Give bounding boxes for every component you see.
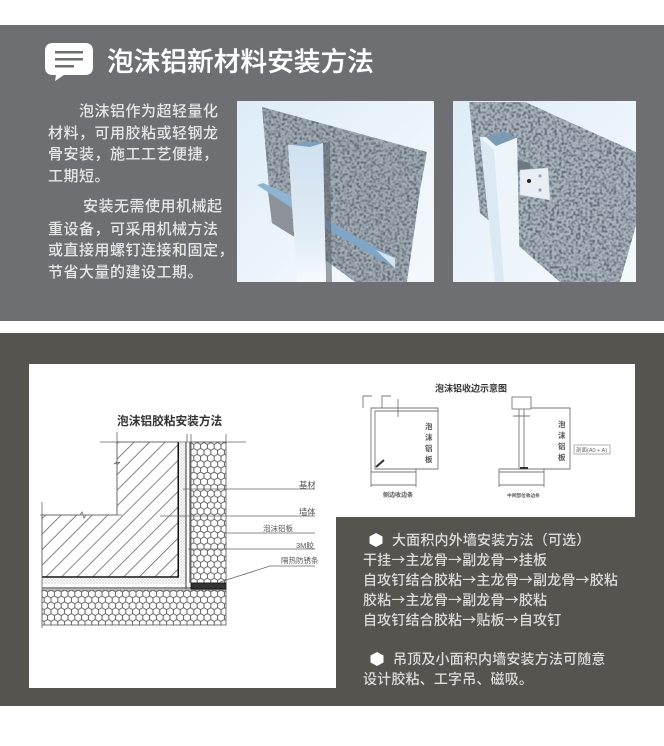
side trim profile: 沫 [425, 432, 433, 442]
text block: ceiling installation note [363, 649, 606, 689]
glue layers [42, 442, 226, 589]
side trim profile [363, 396, 438, 499]
text: ceiling note line 1: 吊顶及小面积内墙安装方法可随意 [393, 649, 606, 669]
text: second paragraph [48, 198, 234, 281]
labels: 泡沫铝板 [263, 523, 293, 533]
labels: 墙体 [299, 507, 316, 517]
guide lines [40, 432, 315, 628]
panel: bottom section background [0, 333, 664, 706]
side trim profile: 泡 [425, 421, 433, 431]
text block: intro paragraphs [48, 103, 234, 281]
text: method step 2: 自攻钉结合胶粘→主龙骨→副龙骨→胶粘 [363, 570, 618, 590]
panel: white drawing sheet [29, 364, 635, 688]
middle trim profile: 中间部位收边条 [507, 492, 540, 499]
heading: adhesive method: 泡沫铝胶粘安装方法 [117, 414, 223, 428]
labels: 基材 [299, 480, 316, 490]
text: first paragraph: 材料，可用胶粘或轻钢龙 [48, 125, 219, 142]
text: method heading: 大面积内外墙安装方法（可选） [392, 530, 590, 550]
icon: hexagon bullet [370, 652, 384, 666]
text: ceiling note line 2: 设计胶粘、工字吊、磁吸。 [363, 669, 533, 689]
panel: dark text cutout [336, 517, 664, 706]
side trim profile: 侧边收边条 [383, 491, 413, 499]
middle trim profile [499, 397, 610, 499]
middle trim profile: 剖面(A0 + A) [576, 446, 607, 454]
text: first paragraph: 泡沫铝作为超轻量化 [79, 103, 219, 120]
foam panel horizontal [42, 590, 226, 625]
text: method step 1: 干挂→主龙骨→副龙骨→挂板 [363, 550, 547, 570]
icon: hexagon bullet [370, 533, 382, 547]
text: method step 4: 自攻钉结合胶粘→贴板→自攻钉 [363, 610, 561, 630]
middle trim profile: 铝 [558, 441, 566, 451]
text: second paragraph: 安装无需使用机械起 [83, 198, 223, 215]
middle trim profile: 沫 [558, 430, 566, 440]
insulation strip [191, 583, 226, 589]
labels [263, 480, 319, 565]
wall hatch [42, 442, 178, 577]
title: 泡沫铝新材料安装方法 [107, 47, 374, 77]
middle trim profile: 泡 [558, 419, 566, 429]
wall edge line [42, 442, 178, 577]
foam panel vertical [191, 442, 226, 583]
text: first paragraph: 骨安装，施工工艺便捷， [48, 146, 219, 163]
text: method step 3: 胶粘→主龙骨→副龙骨→胶粘 [363, 590, 547, 610]
text block: large-area installation methods [363, 530, 618, 630]
side trim profile: 铝 [425, 443, 432, 453]
text: second paragraph: 节省大量的建设工期。 [48, 264, 203, 281]
heading: edge trim: 泡沫铝收边示意图 [435, 382, 507, 394]
text: first paragraph: 工期短。 [48, 168, 110, 185]
labels: 隔热防锈条 [281, 555, 319, 565]
text: second paragraph: 或直接用螺钉连接和固定， [48, 242, 234, 259]
panel: top section background [0, 25, 664, 321]
middle trim profile: 板 [558, 452, 566, 462]
text: first paragraph [48, 103, 219, 185]
labels: 3M胶 [296, 540, 314, 550]
side trim profile: 板 [425, 454, 433, 464]
text: second paragraph: 重设备，可采用机械方法 [48, 221, 219, 238]
